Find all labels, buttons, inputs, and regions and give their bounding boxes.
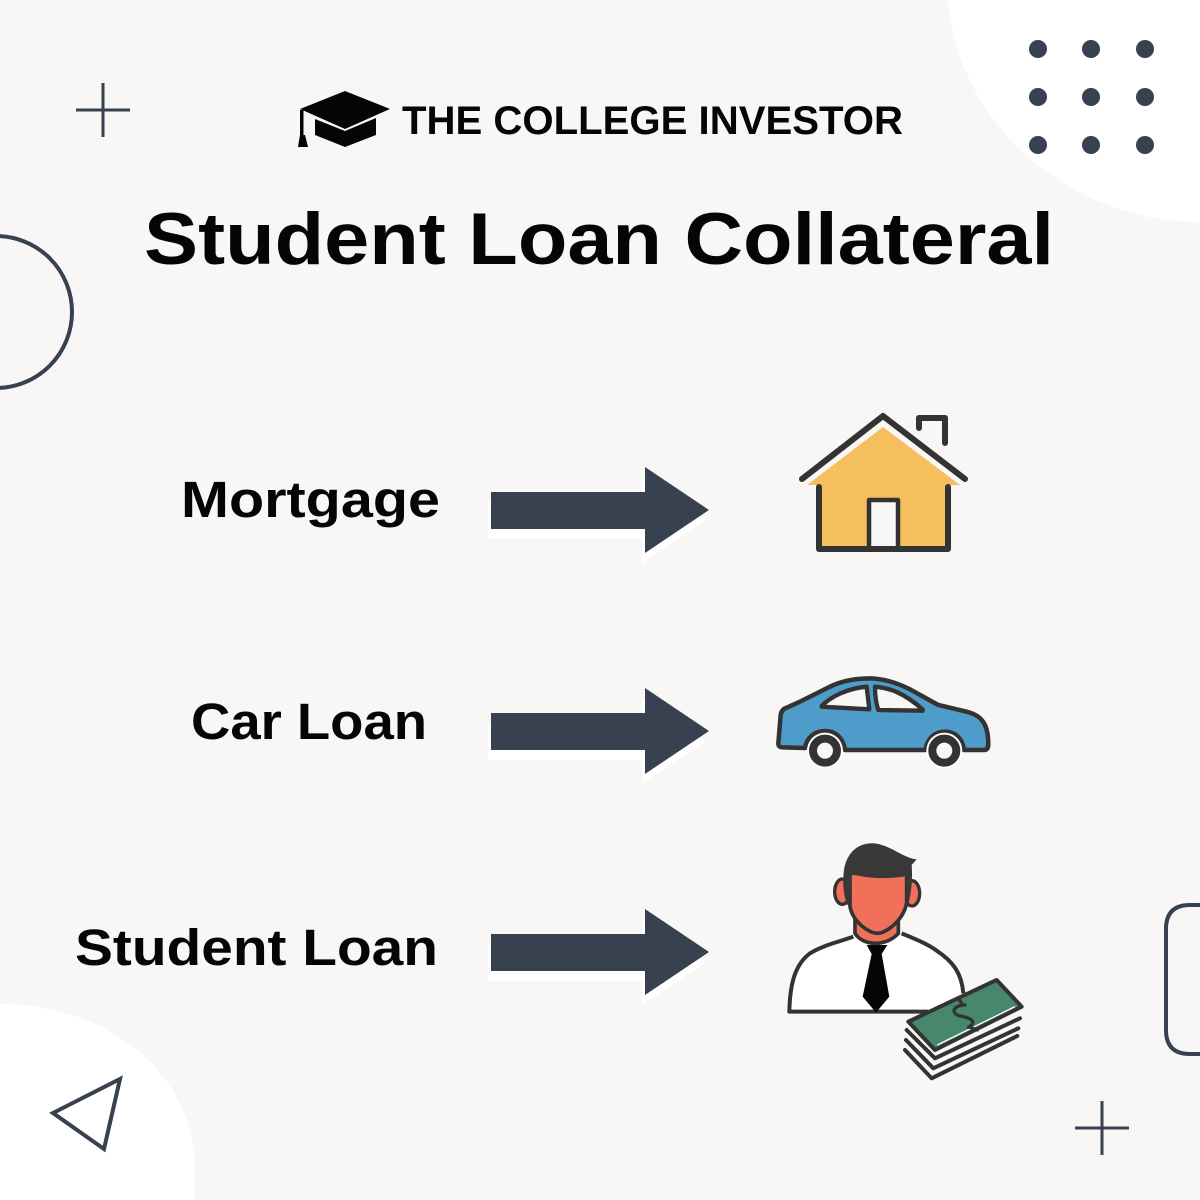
- plus mark: top left: [76, 83, 130, 137]
- triangle outline: bottom left: [53, 1079, 120, 1149]
- title: Student Loan Collateral: [144, 199, 1054, 280]
- icon: car: [778, 678, 988, 769]
- label: student loan: Student Loan: [75, 919, 438, 976]
- plus mark: bottom right: [1075, 1101, 1129, 1155]
- dot grid: [1029, 40, 1154, 154]
- logo wordmark: THE COLLEGE INVESTOR: [402, 99, 903, 143]
- arrow: mortgage: [488, 467, 709, 563]
- label: mortgage: Mortgage: [181, 471, 440, 528]
- logo: [298, 91, 903, 147]
- icon: house: [802, 416, 965, 549]
- person: [789, 843, 963, 1013]
- row: car loan: [191, 678, 988, 784]
- arrow: car loan: [488, 688, 709, 784]
- arrow: student loan: [488, 909, 709, 1005]
- white corner shape: top right: [948, 0, 1200, 222]
- row: student loan: [75, 843, 1022, 1078]
- white corner shape: bottom left: [0, 1004, 195, 1200]
- icon: person with money: [789, 843, 1022, 1078]
- half circle outline: left: [0, 236, 72, 388]
- row: mortgage: [181, 416, 965, 563]
- icon: graduation cap: [298, 91, 390, 147]
- stack of bills: [905, 980, 1022, 1078]
- rounded outline shape: right: [1166, 905, 1200, 1054]
- label: car loan: Car Loan: [191, 693, 427, 750]
